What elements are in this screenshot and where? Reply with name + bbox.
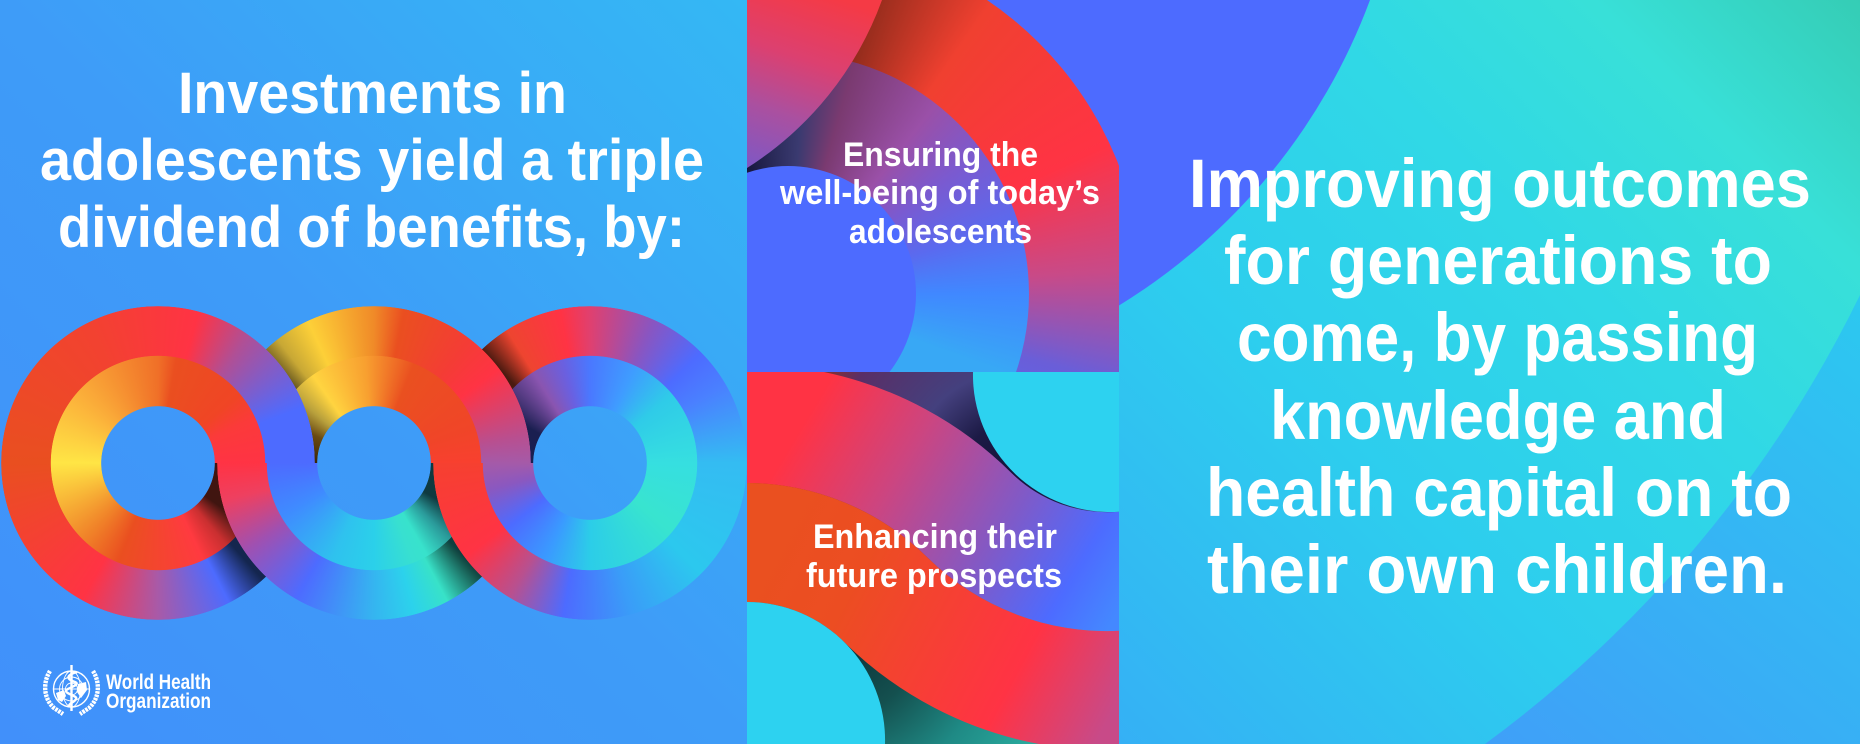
ring 2 upper outer band bbox=[266, 306, 531, 463]
text: organization name bbox=[106, 671, 211, 713]
logo: World Health Organization bbox=[45, 665, 211, 714]
icon: WHO emblem bbox=[45, 665, 98, 714]
ring 1 upper outer band bbox=[1, 306, 315, 463]
text: improving outcomes: their own children. bbox=[1207, 531, 1787, 608]
text: improving outcomes: Improving outcomes bbox=[1189, 145, 1811, 222]
heading: left bbox=[40, 61, 704, 260]
chart: interlaced triple ring ribbon bbox=[1, 306, 747, 620]
outer arc band bbox=[433, 0, 1143, 649]
ring 2 lower outer band bbox=[217, 463, 482, 620]
blue arc bottom right bbox=[1485, 295, 1860, 744]
text: enhancing prospects: future prospects bbox=[806, 557, 1062, 595]
text: organization name: World Health bbox=[106, 671, 211, 694]
text: improving outcomes: for generations to bbox=[1224, 222, 1772, 299]
inner blue circle bbox=[660, 166, 916, 422]
upper ribbon band bbox=[747, 372, 1119, 631]
cyan circle top right bbox=[973, 372, 1119, 512]
heading: left: adolescents yield a triple bbox=[40, 128, 704, 193]
text: ensuring well-being bbox=[779, 136, 1100, 251]
middle arc band bbox=[547, 53, 1029, 535]
ring 1 lower outer band bbox=[1, 463, 266, 620]
text: organization name: Organization bbox=[106, 690, 211, 713]
ring 1 lower inner band bbox=[50, 463, 236, 570]
ring 2 upper inner band bbox=[296, 356, 482, 463]
text: ensuring well-being: well-being of today’s bbox=[779, 174, 1100, 212]
ring 3 lower outer band bbox=[433, 463, 747, 620]
heading: left: Investments in bbox=[178, 61, 567, 126]
panel: top middle bbox=[747, 0, 1119, 372]
cyan circle bottom left bbox=[747, 602, 885, 744]
corner gradient circle bbox=[747, 0, 882, 168]
ring 1 upper inner band bbox=[50, 356, 266, 463]
text: enhancing prospects: Enhancing their bbox=[813, 518, 1057, 556]
text: enhancing prospects bbox=[806, 518, 1062, 595]
text: ensuring well-being: adolescents bbox=[849, 213, 1032, 251]
ring 3 upper outer band bbox=[482, 306, 747, 463]
text: improving outcomes: knowledge and bbox=[1270, 377, 1726, 454]
panel: left background bbox=[0, 0, 747, 744]
ring 3 lower inner band bbox=[482, 463, 698, 570]
heading: left: dividend of benefits, by: bbox=[58, 195, 685, 260]
text: improving outcomes bbox=[1189, 145, 1811, 608]
text: improving outcomes: come, by passing bbox=[1237, 299, 1758, 376]
blue arc top left bbox=[1119, 0, 1370, 306]
lower ribbon band bbox=[747, 483, 1119, 744]
text: ensuring well-being: Ensuring the bbox=[843, 136, 1038, 174]
text: improving outcomes: health capital on to bbox=[1206, 454, 1792, 531]
ring 2 lower inner band bbox=[266, 463, 452, 570]
panel: right background bbox=[1119, 0, 1860, 744]
ring 3 upper inner band bbox=[512, 356, 698, 463]
panel: bottom middle bbox=[747, 372, 1119, 744]
